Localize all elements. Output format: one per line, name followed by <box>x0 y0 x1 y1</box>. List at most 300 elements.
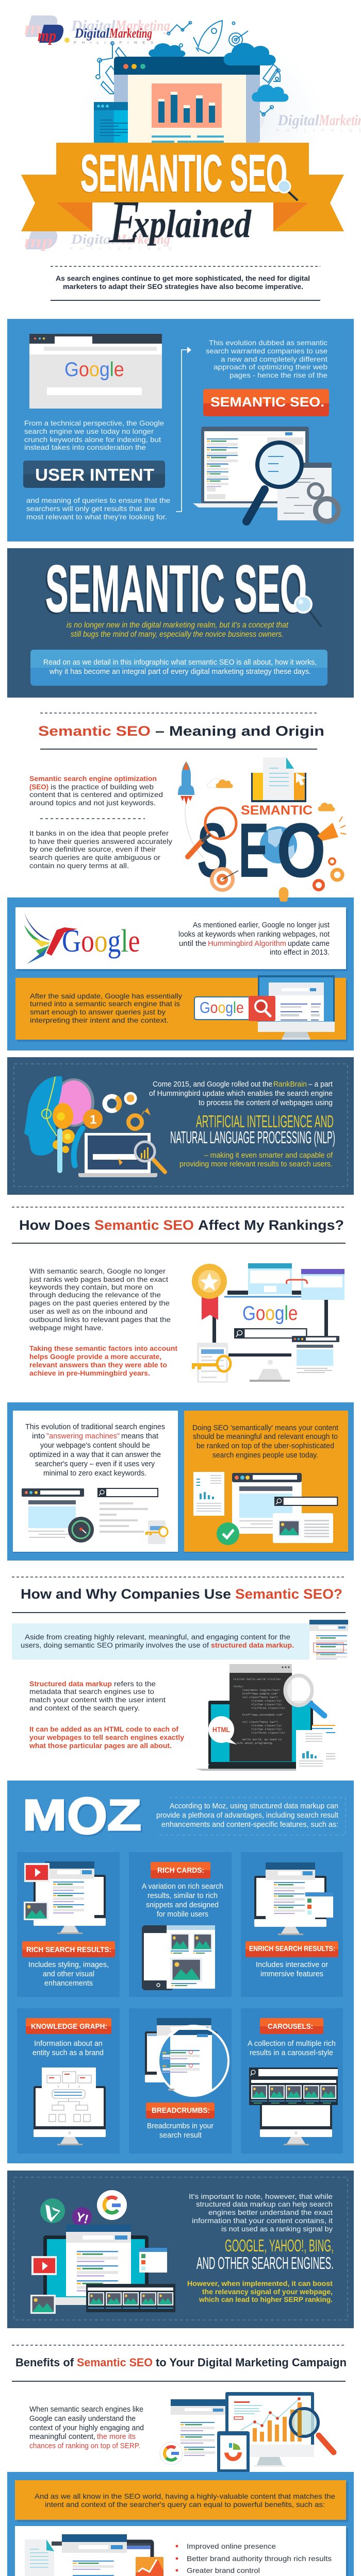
text: definition: by one definitive source, even if their <box>29 845 156 853</box>
text: evolution: pages - hence the rise of the <box>229 371 327 379</box>
callout: valuable content <box>15 2480 348 2522</box>
icon: google g <box>160 2442 183 2465</box>
label: knowledge graph <box>26 2018 111 2034</box>
text: according to moz <box>156 1798 346 1835</box>
heading: benefits <box>12 2345 347 2381</box>
text: rankbrain: – a part <box>308 1080 333 1089</box>
panel: user intent <box>7 319 354 541</box>
heading: how and why: How and Why Companies Use <box>21 1586 231 1602</box>
card: after the update: turned into a semantic search engine that is <box>30 999 180 1008</box>
label: carousels <box>260 2018 323 2034</box>
card: doing seo semantically: Doing SEO 'semantically' means your content <box>192 1423 339 1432</box>
illustration: voice search and chart <box>21 2534 163 2576</box>
callout: structured data: structured data markup. <box>211 1641 294 1649</box>
icon: key <box>192 1356 231 1371</box>
illustration: search engines and monitor <box>30 2190 175 2314</box>
heading: benefits: to Your Digital Marketing Campaign <box>156 2356 347 2369</box>
code panel: <li>Three class</li> <box>251 1731 285 1735</box>
text: technical perspective <box>24 419 164 451</box>
text: according to moz: provide a plethora of advantages, including search result <box>156 1811 339 1820</box>
text <box>32 2039 104 2057</box>
heading: affect my rankings: Semantic SEO <box>94 1217 194 1233</box>
text: entity such as a brand <box>32 2048 104 2057</box>
text <box>147 2122 214 2140</box>
monitor illustration <box>24 1861 106 1934</box>
moz logo: Z <box>107 1791 141 1839</box>
icon: yahoo: Y! <box>74 2210 90 2227</box>
text: meaning of queries: most relevant to what they're looking for. <box>26 513 167 521</box>
text <box>142 1882 223 1919</box>
text: as mentioned: looks at keywords when ranking webpages, not <box>178 930 330 939</box>
panel: semantic seo intro <box>7 548 354 698</box>
text: Information about an <box>34 2039 103 2048</box>
icon: magnifier <box>278 180 297 200</box>
text: boost relevancy: the relevancy signal of your webpage, <box>202 2287 333 2296</box>
heading: ai and nlp <box>170 1112 335 1147</box>
ribbon banner <box>21 143 344 231</box>
code panel: <ul class="menu two"> <box>242 1720 278 1724</box>
card: rich search results <box>17 1852 120 1997</box>
panel: powerful benefits <box>7 2472 354 2576</box>
watermark logos: mp <box>24 17 53 39</box>
code panel: Hello world, we need to <box>242 1738 282 1741</box>
text: chances of ranking: chances of ranking on top of SERP. <box>29 2442 140 2450</box>
heading: search engines <box>196 2236 334 2273</box>
label: rich cards <box>151 1862 210 1878</box>
code panel: talk about programing. <box>236 1741 274 1745</box>
text: how it works: through deducing the relevance of the <box>29 1291 161 1299</box>
text: and other visual <box>43 1970 94 1978</box>
icon: hummingbird wings <box>24 912 77 964</box>
watermark logos: mp <box>24 232 53 251</box>
monitor carousel illustration <box>249 2067 338 2145</box>
code panel: <li>One class</li> <box>251 1699 282 1703</box>
logo: Digital <box>74 26 110 41</box>
text: definition: contain no query terms at all. <box>29 861 129 870</box>
logo: mp <box>38 27 56 45</box>
heading: benefits: Benefits of <box>15 2356 74 2369</box>
callout: valuable content: And as we all know in the SEO world, having a highly-valuable content that matches the <box>35 2492 335 2500</box>
list: benefits: Better brand authority through rich results <box>187 2554 332 2563</box>
text: definition: around topics and not just keywords. <box>29 799 156 807</box>
text: definition: (SEO) <box>29 783 48 791</box>
heading: benefits: Semantic SEO <box>77 2356 153 2369</box>
text: boost relevancy <box>187 2279 333 2303</box>
text: evolution: approach of optimizing their web <box>214 363 327 371</box>
text: important to note: is not used as a ranking signal by <box>221 2225 333 2233</box>
card: answering machines: means that <box>121 1432 159 1440</box>
text: A variation on rich search <box>142 1882 223 1891</box>
text: rankbrain: RankBrain <box>273 1080 307 1089</box>
letters: seo: S <box>197 807 228 893</box>
google browser illustration <box>29 334 162 409</box>
text: for mobile users <box>157 1910 208 1919</box>
text <box>256 1960 328 1978</box>
text: important to note: It's important to note, however, that while <box>189 2192 333 2200</box>
text: evolution: search warranted companies to use <box>206 347 327 355</box>
text: results in a carousel-style <box>250 2048 333 2057</box>
panel: not a ranking signal <box>7 2171 354 2328</box>
letters: seo <box>197 807 326 893</box>
title: explained script: xplained <box>133 202 252 246</box>
heading: affect my rankings: Affect My Rankings? <box>198 1217 344 1233</box>
icon: bing <box>40 2198 65 2223</box>
illustration: search results and magnifier <box>193 427 338 521</box>
panel: moz benefits <box>7 1781 354 2163</box>
card: answering machines: into <box>32 1432 45 1440</box>
text: how it works: outbound links to relevant pages that the <box>29 1315 171 1324</box>
heading: meaning and origin: – Meaning and Origin <box>155 723 324 739</box>
list: benefits <box>176 2542 332 2576</box>
tagline <box>67 621 288 639</box>
text: structured data markup: refers to the <box>114 1680 156 1688</box>
heading: meaning and origin: Semantic SEO <box>38 723 151 739</box>
title: explained script <box>108 188 252 256</box>
text: snippets and designed <box>146 1901 219 1909</box>
text: how it works <box>29 1267 177 1377</box>
code panel: <li>Two class</li> <box>251 1727 282 1731</box>
text: meaning of queries: and meaning of queries to ensure that the <box>26 496 170 504</box>
letters: seo: O <box>276 807 326 893</box>
code panel: <ul class="menu two"> <box>242 1696 278 1699</box>
label: breadcrumbs <box>146 2103 215 2119</box>
illustration: browser and gauge <box>22 1488 94 1543</box>
text: how it works: just ranks web pages based on the exact <box>29 1275 168 1283</box>
code panel: <title> hello world </title> <box>233 1677 281 1681</box>
card: after the update <box>15 975 348 1042</box>
mini browser <box>292 1336 339 1373</box>
text: smarter <box>179 1151 333 1168</box>
icon: megaphone <box>317 817 346 841</box>
text: definition: content that is centered and optimized <box>29 790 163 799</box>
label: enrich search results <box>245 1941 338 1957</box>
badge: user intent <box>23 461 165 488</box>
text: A collection of multiple rich <box>248 2039 336 2048</box>
monitor stand <box>250 1360 290 1382</box>
icon: magnifier <box>285 1675 324 1716</box>
badge: user intent: USER INTENT <box>35 465 154 484</box>
watermark logos: Digital <box>71 232 116 247</box>
card: carousels <box>241 2008 343 2154</box>
tagline: is no longer new in the digital marketing realm, but it's a concept that <box>67 621 288 630</box>
card: answering machines: your webpage's content should be <box>40 1441 150 1450</box>
search box <box>234 1328 307 1338</box>
illustration: search and phone <box>97 1488 168 1544</box>
report document <box>296 1725 335 1769</box>
callout: read on <box>30 650 327 686</box>
code panel: <body> <box>233 1685 243 1688</box>
icon: clouds right <box>224 43 288 102</box>
text: enhancements <box>44 1979 93 1988</box>
illustration: monitor with google search <box>194 975 335 1040</box>
google browser illustration: Google <box>64 358 124 380</box>
text: definition: to have their queries answered accurately <box>29 837 172 845</box>
html speech bubble: HTML <box>212 1725 230 1734</box>
heading: affect my rankings <box>12 1207 346 1243</box>
intro statement <box>51 266 320 300</box>
heading: meaning and origin <box>38 713 324 749</box>
text: how it works: webpage might have. <box>29 1324 104 1332</box>
code panel: <li>One class</li> <box>251 1724 282 1727</box>
text: how it works: Taking these semantic factors into account <box>29 1344 177 1352</box>
text: important to note: information that your content contains, it <box>192 2216 333 2225</box>
small window left <box>94 102 128 143</box>
text: technical perspective: From a technical perspective, the Google <box>24 419 164 427</box>
google logo: Google <box>242 1302 298 1325</box>
letters: seo: E <box>238 807 269 893</box>
text: how it works: achieve in pre-Hummingbird years. <box>29 1369 150 1377</box>
title: explained script: E <box>108 188 139 256</box>
card: doing seo semantically: search engines people use today. <box>212 1451 318 1460</box>
text: as mentioned: update came <box>288 939 330 948</box>
text: definition: is the practice of building web <box>51 783 154 791</box>
text: semantic: SEMANTIC <box>241 803 313 818</box>
card: after the update: interpreting their intent and the context. <box>30 1016 169 1024</box>
text: structured data markup: It can be added as an HTML code to each of <box>29 1725 178 1733</box>
callout: valuable content: intent and context of the searcher's query can equal to powerful benefits, such as: <box>45 2500 325 2509</box>
heading: affect my rankings: How Does <box>19 1217 90 1233</box>
text: evolution <box>206 338 327 379</box>
text: how it works: keywords they contain, but more on <box>29 1283 153 1291</box>
text: chances of ranking: When semantic search engines like <box>29 2405 143 2414</box>
card: after the update: After the said update, Google has essentially <box>30 992 182 1000</box>
text: definition <box>29 774 172 870</box>
tagline: still bugs the mind of many, especially the novice business owners. <box>71 630 284 639</box>
label: breadcrumbs: BREADCRUMBS: <box>152 2106 210 2115</box>
text: technical perspective: search engine we use today no longer <box>24 427 154 435</box>
watermark logos: PHILIPPINES <box>70 247 171 251</box>
browser window <box>114 57 260 143</box>
text: chances of ranking <box>29 2405 144 2450</box>
text: evolution: This evolution dubbed as semantic <box>209 338 327 347</box>
text: smarter: – making it even smarter and capable of <box>204 1151 333 1160</box>
illustration: ai head and laptop <box>24 1076 165 1177</box>
text: structured data markup: match your content with the user intent <box>29 1696 166 1704</box>
icon: google <box>97 2190 127 2220</box>
icon: yahoo <box>72 2207 92 2227</box>
label: knowledge graph: KNOWLEDGE GRAPH: <box>31 2022 107 2031</box>
card: answering machines: optimized in a way that it can answer the <box>29 1450 161 1459</box>
callout: structured data: users, doing semantic SEO primarily involves the use of <box>21 1641 209 1649</box>
text: technical perspective: instead takes into consideration the <box>24 443 146 451</box>
text: according to moz: According to Moz, using structured data markup can <box>170 1802 338 1810</box>
code panel: href="www.secondweb.com" <box>242 1713 283 1717</box>
text: how it works: user as well as on the inbound and <box>29 1307 147 1315</box>
text: meaning of queries <box>26 496 170 521</box>
text: meaning of queries: searchers will only get results that are <box>26 504 155 513</box>
icon: gears <box>314 858 342 890</box>
text: rankbrain: Come 2015, and Google rolled out the <box>153 1080 272 1089</box>
logo <box>38 25 153 45</box>
card: hummingbird <box>15 907 348 971</box>
magnified page illustration <box>145 2018 228 2096</box>
text: as mentioned <box>178 921 330 957</box>
illustration: seo composition <box>178 757 346 897</box>
badge: semantic seo: SEMANTIC SEO. <box>210 394 324 410</box>
text: as mentioned: into effect in 2013. <box>270 948 330 957</box>
text: important to note: engines better understand the exact <box>208 2208 333 2216</box>
icon: rocket <box>178 761 204 858</box>
icon: results page <box>309 1620 348 1659</box>
watermark logos: Marketing <box>115 232 170 247</box>
text: Breadcrumbs in your <box>147 2122 214 2130</box>
heading: how and why <box>12 1577 346 1613</box>
callout: structured data <box>12 1620 348 1659</box>
card: answering machines: searcher's query – even if it uses very <box>35 1460 155 1468</box>
code panel: <li>Three class</li> <box>251 1706 285 1710</box>
icon: clouds <box>207 778 335 811</box>
icon: browser windows <box>227 1263 344 1300</box>
phone <box>197 1343 228 1383</box>
text: boost relevancy: which can lead to higher SERP ranking. <box>199 2295 333 2303</box>
icon: target <box>210 867 238 892</box>
label: rich search results <box>22 1941 115 1957</box>
card: rich cards <box>129 1852 232 1997</box>
icon: orange chart <box>136 2557 163 2576</box>
logo: PHILIPPINES <box>74 40 153 45</box>
icon: magnifier orange <box>188 808 236 857</box>
text: definition: It banks in on the idea that people prefer <box>29 829 169 837</box>
card: answering machines: minimal to zero exact keywords. <box>43 1469 146 1478</box>
text: as mentioned: until the <box>179 939 206 948</box>
text: how it works: With semantic search, Google no longer <box>29 1267 166 1275</box>
label: rich cards: RICH CARDS: <box>157 1866 204 1875</box>
text: how it works: pages on the past queries entered by the <box>29 1299 170 1307</box>
panel: doing seo semantically <box>7 1402 354 1561</box>
moz logo <box>23 1787 141 1845</box>
text: structured data markup: Structured data markup <box>29 1680 112 1688</box>
card: answering machines: This evolution of traditional search engines <box>25 1422 165 1431</box>
text: structured data markup: what those particular pages are all about. <box>29 1741 172 1750</box>
monitor illustration <box>254 1862 333 1935</box>
code panel <box>229 1664 292 1761</box>
text: important to note <box>189 2192 333 2233</box>
card: doing seo semantically: should be meaningful and relevant enough to <box>193 1432 338 1441</box>
code panel: <nav>menu toggle</nav> <box>242 1688 280 1692</box>
intro statement: As search engines continue to get more sophisticated, the need for digital <box>56 274 310 282</box>
text: structured data markup <box>29 1680 184 1750</box>
card: enrich search results <box>241 1852 343 1997</box>
watermark logos: Digital <box>71 17 116 34</box>
text: definition: search queries are quite ambiguous or <box>29 853 160 861</box>
text <box>248 2039 336 2057</box>
text: chances of ranking: meaningful content, <box>29 2432 95 2441</box>
monitor illustration <box>34 2067 106 2145</box>
text: how it works: relevant answers than they were able to <box>29 1361 167 1369</box>
code panel: href="www.sample.com" <box>242 1692 278 1696</box>
callout: structured data: Aside from creating highly relevant, meaningful, and engaging content for the <box>25 1633 290 1641</box>
callout: read on: Read on as we detail in this infographic what semantic SEO is all about, how it works, <box>43 658 317 667</box>
text: results, similar to rich <box>147 1891 218 1900</box>
text: chances of ranking: context of your highly engaging and <box>29 2424 144 2432</box>
panel: rankbrain <box>7 1057 354 1195</box>
card: answering machines <box>13 1411 178 1553</box>
html speech bubble <box>208 1716 237 1744</box>
icon: magnifier <box>295 596 321 626</box>
card: answering machines: "answering machines" <box>46 1432 120 1440</box>
illustration: browser with search and card <box>217 1473 338 1545</box>
card: doing seo semantically <box>184 1411 348 1553</box>
text: important to note: structured data markup can help search <box>196 2200 333 2208</box>
arrow <box>176 347 191 512</box>
moz logo: O <box>67 1787 107 1845</box>
browser results <box>171 2399 225 2456</box>
text: chances of ranking: Google can easily understand the <box>29 2414 136 2423</box>
card: after the update: smart enough to answer queries just by <box>30 1008 166 1016</box>
icon: tablet with pie <box>217 2431 250 2473</box>
text: boost relevancy: However, when implemented, it can boost <box>187 2279 333 2287</box>
illustration: analytics dashboard <box>160 2392 334 2473</box>
label: carousels: CAROUSELS: <box>268 2022 313 2031</box>
icon: monitor with document <box>251 757 306 802</box>
text: structured data markup: and context of the search query. <box>29 1704 140 1712</box>
code panel: <li>Two class</li> <box>251 1703 282 1706</box>
moz logo: M <box>23 1791 67 1839</box>
card: breadcrumbs <box>129 2008 232 2154</box>
text: evolution: a new and completely different <box>221 355 327 363</box>
watermark logos: Digital <box>277 111 319 129</box>
illustration: report document <box>193 1472 224 1516</box>
illustration: html code on laptop <box>195 1664 335 1771</box>
text: Includes interactive or <box>256 1960 328 1969</box>
text: structured data markup: your webpages to tell search engines exactly <box>29 1733 184 1741</box>
callout: read on: why it has become an integral part of every digital marketing strategy these days. <box>49 667 311 676</box>
text: definition: Semantic search engine optimization <box>29 774 157 783</box>
text <box>28 1960 109 1988</box>
globe <box>260 826 297 863</box>
phone illustration <box>142 1925 215 1990</box>
icon: magnifier <box>290 2409 334 2452</box>
text: immersive features <box>260 1970 323 1978</box>
text: rankbrain: of Hummingbird update which enables the search engine <box>149 1089 333 1098</box>
text: how it works: helps Google provide a more accurate, <box>29 1352 161 1361</box>
label: enrich search results: ENRICH SEARCH RESULTS: <box>249 1944 335 1953</box>
badge: semantic seo <box>203 389 329 416</box>
illustration: monitor with google search: Google <box>200 999 244 1016</box>
text: smarter: providing more relevant results to search users. <box>179 1160 333 1168</box>
icon: light bulb <box>279 887 288 897</box>
label: rich search results: RICH SEARCH RESULTS: <box>26 1945 111 1954</box>
panel: header hero <box>21 15 361 256</box>
text: according to moz: enhancements and content-specific features, such as: <box>161 1820 338 1829</box>
icon: line art rocket and charts <box>96 21 280 131</box>
text: Includes styling, images, <box>28 1960 109 1969</box>
text: technical perspective: crunch keywords alone for indexing, but <box>24 435 161 444</box>
text: as mentioned: As mentioned earlier, Google no longer just <box>193 921 330 929</box>
icon: cloud left <box>149 43 185 57</box>
icon: medal <box>192 1264 227 1320</box>
heading: how and why: Semantic SEO? <box>235 1586 342 1602</box>
card: knowledge graph <box>17 2008 120 2154</box>
logo: Marketing <box>109 26 152 41</box>
google serif logo: Google <box>62 924 140 959</box>
card: doing seo semantically: be ranked on top of the uber-sophisticated <box>196 1442 334 1450</box>
card: benefits list <box>15 2526 348 2576</box>
text: search result <box>159 2131 202 2140</box>
panel: hummingbird and update <box>7 887 354 1050</box>
list: benefits: Improved online presence <box>187 2542 276 2550</box>
text: structured data markup: metadata that search engines use to <box>29 1687 154 1696</box>
text: rankbrain: to process the content of webpages using <box>199 1098 333 1107</box>
watermark logos: Marketing <box>115 17 170 34</box>
illustration: ranking factors <box>192 1263 344 1383</box>
text: rankbrain <box>149 1080 333 1107</box>
watermark logos <box>24 15 361 251</box>
text: chances of ranking: the more its <box>97 2432 136 2441</box>
text: as mentioned: Hummingbird Algorithm <box>208 939 286 948</box>
intro statement: marketers to adapt their SEO strategies have also become imperative. <box>63 282 303 291</box>
illustration: ai head and laptop: 1 <box>90 1113 96 1127</box>
